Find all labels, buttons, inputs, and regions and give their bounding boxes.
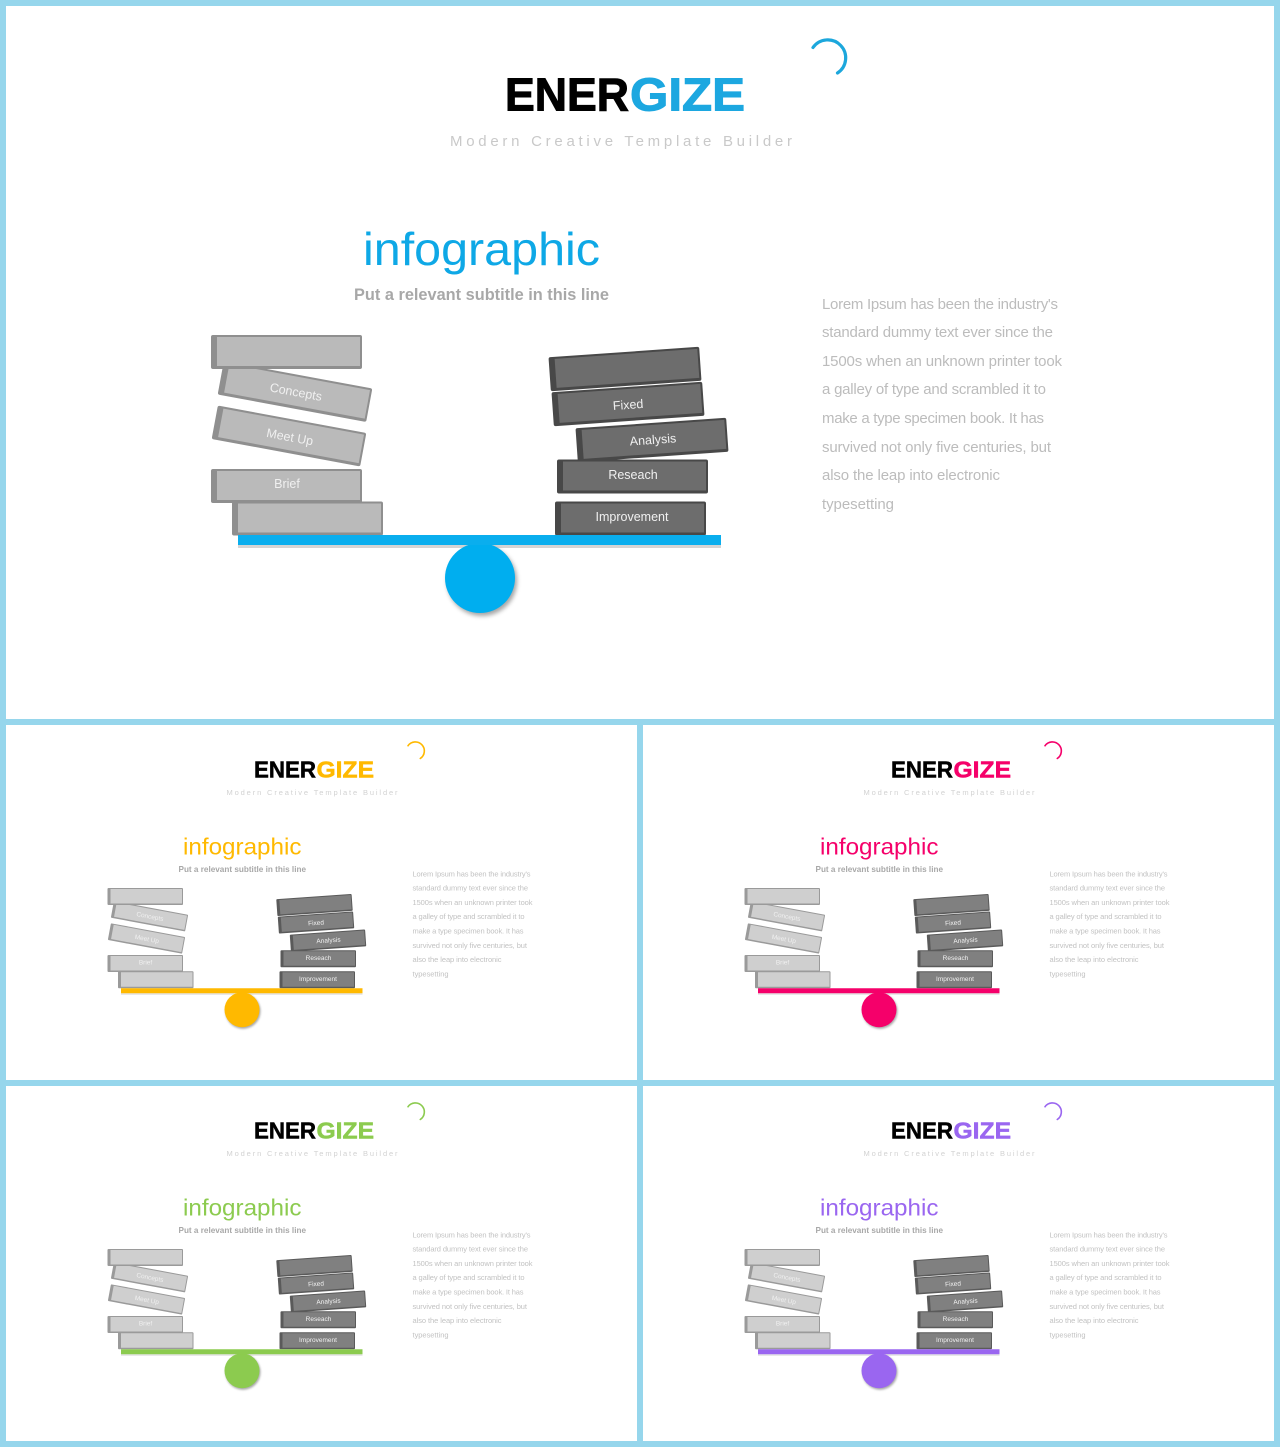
chart: dark book stack: Improvement — [936, 1337, 974, 1344]
seesaw: plank and ball yellow — [121, 988, 362, 1027]
chart: light book stack: Brief — [776, 1320, 789, 1328]
tagline: Modern Creative Template Builder — [226, 1149, 398, 1158]
text block: body copy: a galley of type and scrambled it to — [412, 912, 524, 921]
chart: light book stack: Concepts — [136, 911, 165, 923]
text block: body copy — [412, 1230, 533, 1340]
chart: light book stack: Concepts — [136, 1272, 165, 1284]
text block: body copy: make a type specimen book. It has — [1050, 1288, 1161, 1296]
panel: pink slide — [643, 725, 1274, 1080]
text block: body copy: survived not only five centuries, but — [1050, 941, 1165, 950]
heading: infographic green: infographic — [183, 1194, 302, 1220]
subtitle: Put a relevant subtitle in this line — [354, 285, 609, 304]
text block: body copy: typesetting — [412, 970, 448, 978]
text block: body copy: Lorem Ipsum has been the industry's — [412, 1230, 531, 1240]
chart: light book stack: Concepts — [773, 911, 802, 923]
text block: body copy: also the leap into electronic — [412, 955, 502, 964]
text block: body copy: standard dummy text ever since the — [822, 324, 1053, 341]
chart: dark book stack — [276, 894, 366, 988]
text block: body copy: survived not only five centuries, but — [412, 941, 528, 950]
icon: pink arc — [1045, 742, 1061, 758]
logo: ENERGIZE: ENER — [505, 68, 629, 120]
logo: ENERGIZE purple: ENER — [891, 1117, 953, 1143]
text block: body copy: a galley of type and scrambled it to — [1050, 1273, 1162, 1282]
text block: body copy: a galley of type and scrambled it to — [412, 1273, 524, 1282]
text block: body copy: 1500s when an unknown printer took — [1050, 1259, 1170, 1268]
panel: main blue slide — [6, 6, 1274, 719]
logo: ENERGIZE green: GIZE — [316, 1117, 374, 1143]
text block: body copy: standard dummy text ever since the — [1050, 884, 1165, 892]
heading: infographic yellow: infographic — [183, 834, 302, 860]
chart: light book stack: Concepts — [773, 1272, 802, 1284]
text block: body copy — [822, 296, 1062, 513]
chart: dark book stack: Fixed — [308, 1280, 325, 1289]
text block: body copy: Lorem Ipsum has been the industry's — [412, 870, 531, 878]
chart: dark book stack: Improvement — [936, 976, 974, 983]
text block: body copy: 1500s when an unknown printer took — [1050, 898, 1170, 907]
text block: body copy: make a type specimen book. It has — [412, 926, 524, 936]
text block: body copy: survived not only five centuries, but — [412, 1302, 528, 1311]
chart: dark book stack: Analysis — [316, 1298, 342, 1306]
tagline: Modern Creative Template Builder — [864, 788, 1035, 797]
chart: dark book stack: Reseach — [943, 955, 969, 962]
logo: ENERGIZE yellow — [254, 756, 374, 782]
seesaw: plank and ball green — [121, 1349, 362, 1388]
text block: body copy: also the leap into electronic — [412, 1316, 502, 1325]
text block: body copy — [412, 870, 533, 978]
text block: body copy: 1500s when an unknown printer took — [822, 353, 1062, 370]
text block: body copy — [1050, 1230, 1170, 1340]
text block: body copy: make a type specimen book. It has — [412, 1288, 524, 1296]
chart: dark book stack: Analysis — [629, 431, 677, 449]
chart: light book stack: Meet Up — [771, 1295, 797, 1306]
text block: body copy: Lorem Ipsum has been the industry's — [1050, 1230, 1168, 1240]
chart: dark book stack: Reseach — [306, 1316, 332, 1323]
heading: infographic: infographic — [363, 223, 600, 275]
chart: dark book stack: Reseach — [608, 468, 658, 482]
text block: body copy: also the leap into electronic — [1050, 955, 1139, 964]
chart: light book stack — [108, 888, 194, 988]
seesaw: plank and ball pink — [758, 988, 1000, 1027]
logo: ENERGIZE pink: GIZE — [954, 756, 1011, 782]
text block: body copy: standard dummy text ever since the — [412, 884, 528, 892]
subtitle: Put a relevant subtitle in this line — [816, 864, 943, 874]
chart: light book stack — [211, 335, 383, 536]
chart: dark book stack: Improvement — [596, 510, 669, 524]
heading: infographic purple: infographic — [820, 1194, 938, 1220]
text block: body copy: Lorem Ipsum has been the industry's — [822, 296, 1058, 313]
chart: dark book stack: Reseach — [943, 1316, 969, 1323]
chart: light book stack — [744, 1249, 830, 1349]
subtitle: Put a relevant subtitle in this line — [816, 1225, 943, 1235]
chart: dark book stack: Fixed — [945, 1280, 962, 1289]
text block: body copy: survived not only five centuries, but — [1050, 1302, 1165, 1311]
text block: body copy: survived not only five centuries, but — [822, 439, 1052, 456]
chart: dark book stack: Fixed — [945, 919, 962, 928]
chart: dark book stack: Reseach — [306, 955, 332, 962]
chart: light book stack: Brief — [274, 477, 300, 491]
seesaw: plank and ball — [238, 535, 721, 613]
text block: body copy — [1050, 870, 1170, 978]
icon: arc — [813, 40, 846, 73]
text block: body copy: 1500s when an unknown printer took — [412, 1259, 533, 1268]
text block: body copy: also the leap into electronic — [1050, 1316, 1139, 1325]
chart: dark book stack — [913, 894, 1003, 988]
subtitle: Put a relevant subtitle in this line — [178, 1225, 306, 1235]
text block: body copy: 1500s when an unknown printer took — [412, 898, 533, 907]
text block: body copy: also the leap into electronic — [822, 467, 1000, 484]
panel: green slide — [6, 1086, 637, 1441]
text block: body copy: make a type specimen book. It has — [1050, 926, 1161, 936]
tagline: Modern Creative Template Builder — [226, 788, 398, 797]
panel: yellow slide — [6, 725, 637, 1080]
chart: light book stack: Concepts — [269, 380, 323, 404]
text block: body copy: typesetting — [1050, 970, 1086, 978]
text block: body copy: a galley of type and scrambled it to — [1050, 912, 1162, 921]
text block: body copy: typesetting — [1050, 1330, 1086, 1340]
logo: ENERGIZE purple: GIZE — [954, 1117, 1011, 1143]
text block: body copy: typesetting — [412, 1330, 448, 1340]
logo: ENERGIZE purple — [891, 1117, 1011, 1143]
chart: dark book stack: Improvement — [299, 1337, 337, 1344]
logo: ENERGIZE pink: ENER — [891, 756, 953, 782]
chart: light book stack: Meet Up — [134, 934, 160, 945]
text block: body copy: Lorem Ipsum has been the industry's — [1050, 870, 1168, 878]
logo: ENERGIZE yellow: ENER — [254, 756, 316, 782]
logo: ENERGIZE yellow: GIZE — [316, 756, 374, 782]
icon: purple arc — [1045, 1103, 1061, 1120]
heading: infographic pink: infographic — [820, 834, 938, 860]
chart: dark book stack — [548, 347, 729, 536]
tagline: Modern Creative Template Builder — [450, 133, 792, 150]
chart: dark book stack — [913, 1255, 1003, 1349]
subtitle: Put a relevant subtitle in this line — [178, 864, 306, 874]
text block: body copy: standard dummy text ever since the — [412, 1244, 528, 1254]
chart: light book stack — [744, 888, 830, 988]
logo: ENERGIZE green: ENER — [254, 1117, 316, 1143]
chart: dark book stack: Improvement — [299, 976, 337, 983]
chart: light book stack — [108, 1249, 194, 1349]
text block: body copy: a galley of type and scrambled it to — [822, 381, 1046, 398]
chart: light book stack: Meet Up — [771, 934, 797, 945]
logo: ENERGIZE green — [254, 1117, 374, 1143]
panel: purple slide — [643, 1086, 1274, 1441]
chart: dark book stack: Analysis — [316, 937, 342, 945]
chart: light book stack: Brief — [139, 960, 152, 966]
icon: green arc — [408, 1103, 424, 1120]
chart: dark book stack: Analysis — [953, 937, 979, 945]
chart: dark book stack: Analysis — [953, 1298, 979, 1306]
text block: body copy: typesetting — [822, 496, 894, 513]
icon: yellow arc — [408, 742, 424, 758]
text block: body copy: make a type specimen book. It has — [822, 410, 1044, 427]
chart: light book stack: Brief — [776, 960, 789, 966]
chart: dark book stack: Fixed — [612, 397, 644, 413]
logo: ENERGIZE: GIZE — [630, 68, 745, 120]
logo: ENERGIZE pink — [891, 756, 1011, 782]
chart: light book stack: Brief — [139, 1320, 152, 1328]
chart: light book stack: Meet Up — [134, 1295, 160, 1306]
chart: dark book stack: Fixed — [308, 919, 325, 928]
tagline: Modern Creative Template Builder — [864, 1149, 1035, 1158]
chart: light book stack: Meet Up — [265, 426, 314, 448]
logo: ENERGIZE — [505, 68, 745, 120]
text block: body copy: standard dummy text ever since the — [1050, 1244, 1165, 1254]
chart: dark book stack — [276, 1255, 366, 1349]
seesaw: plank and ball purple — [758, 1349, 1000, 1388]
